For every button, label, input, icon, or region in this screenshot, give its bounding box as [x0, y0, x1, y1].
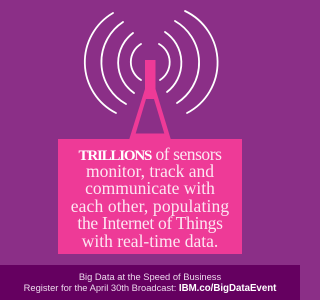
text: message: TRILLIONS of sensors [79, 144, 221, 164]
right signal arcs [159, 11, 218, 113]
text: message: the Internet of Things [77, 213, 223, 233]
text: message: monitor, track and [86, 161, 214, 181]
text: message: each other, populating [71, 196, 229, 216]
left signal arcs [85, 13, 141, 113]
text: message: with real-time data. [82, 230, 218, 250]
text: footer line two: Register for the April 30th Broadcast: IBM.co/BigDataEvent [24, 283, 276, 294]
tower [129, 60, 171, 140]
text: message [71, 144, 229, 250]
text: message: communicate with [85, 178, 215, 198]
panel: footer band [0, 265, 300, 300]
text: footer line one: Big Data at the Speed of Business [79, 272, 221, 282]
icon: radio tower with signal arcs [84, 10, 218, 139]
panel: pink message box [58, 139, 242, 254]
